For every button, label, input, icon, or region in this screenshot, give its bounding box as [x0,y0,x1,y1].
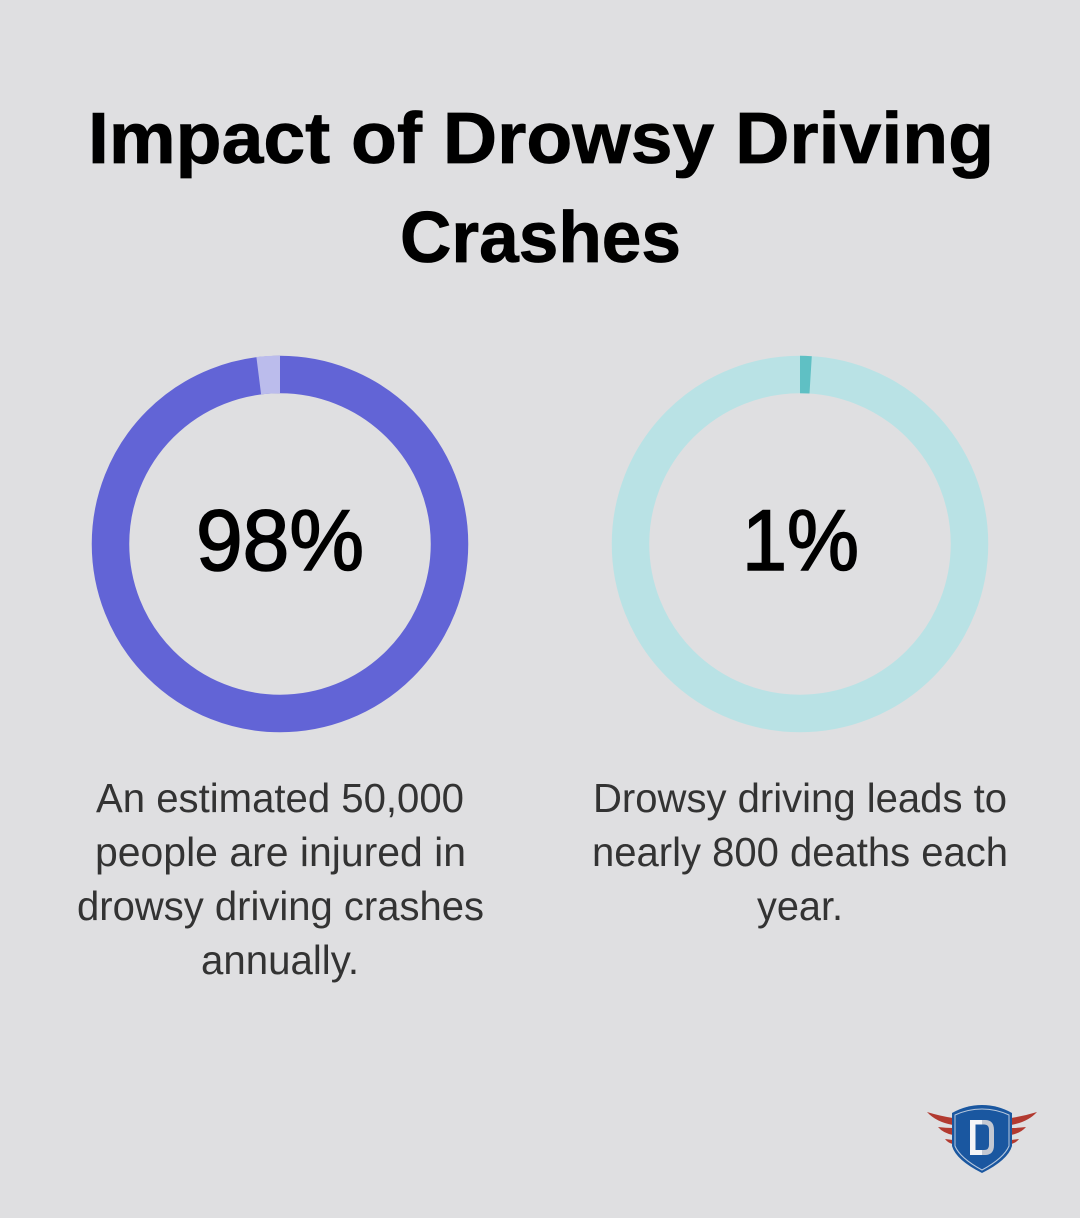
description: injuries: An estimated 50,000 [96,775,464,821]
description: injuries [77,775,484,983]
donut chart: 1% [630,356,970,714]
description: injuries: drowsy driving crashes [77,883,484,929]
title: Impact of Drowsy Driving [88,99,994,179]
description: deaths: nearly 800 deaths each [592,829,1008,875]
description: injuries: annually. [201,937,359,983]
panel: deaths [592,356,1008,929]
description: deaths [592,775,1008,929]
donut chart: 98% [110,356,450,714]
description: injuries: people are injured in [95,829,466,875]
icon: shield logo with wings [927,1105,1037,1173]
title: Crashes [400,198,681,278]
panel: injuries [77,356,484,983]
description: deaths: year. [757,883,843,929]
stat: 1%: 1% [742,493,859,589]
stat: 98%: 98% [196,493,364,589]
title [88,99,994,278]
description: deaths: Drowsy driving leads to [593,775,1007,821]
